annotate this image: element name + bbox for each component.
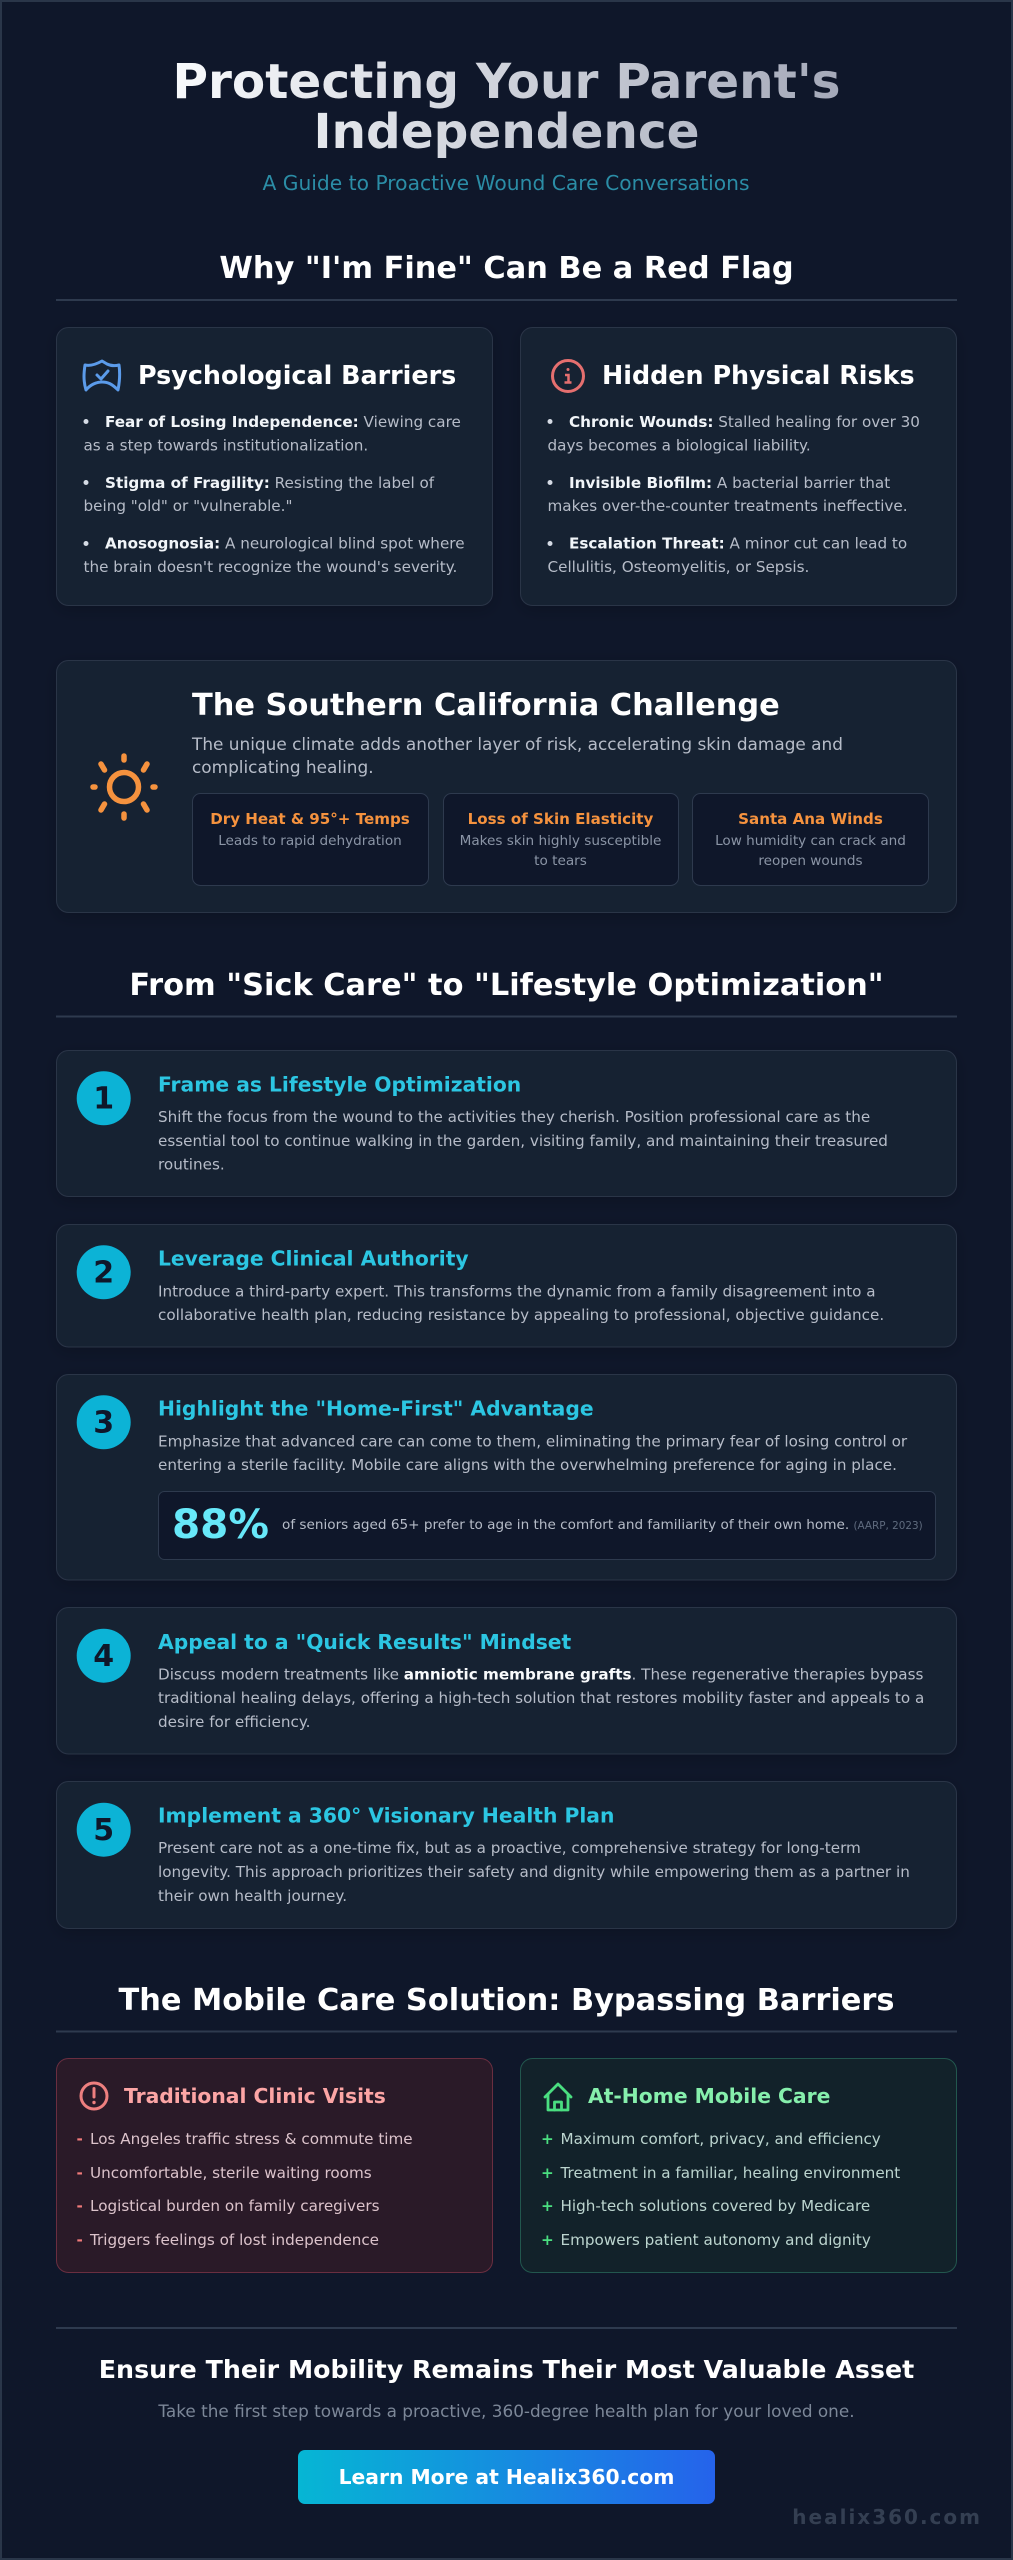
section heading: red flag: Why "I'm Fine" Can Be a Red Flag	[219, 251, 794, 286]
step 4	[56, 1608, 956, 1754]
watermark: healix360.com	[792, 2505, 982, 2529]
step 5: longevity. This approach prioritizes their safety and dignity while empowering them as a partner in	[158, 1863, 910, 1881]
panel: traditional clinic visits	[56, 2058, 492, 2272]
panel: southern california challenge	[56, 660, 956, 912]
call to action button	[298, 2450, 715, 2504]
list	[76, 2130, 413, 2249]
list: days becomes a biological liability.	[548, 436, 811, 454]
step 2	[56, 1224, 956, 1347]
footer rule	[56, 2327, 957, 2329]
section heading: lifestyle optimization: From "Sick Care" to "Lifestyle Optimization"	[129, 968, 884, 1003]
step 3	[56, 1374, 956, 1580]
list	[548, 413, 920, 576]
step 2: collaborative health plan, reducing resistance by appealing to professional, objective guidance.	[158, 1306, 884, 1324]
panel: at-home mobile care	[520, 2058, 956, 2272]
footer subtext: Take the first step towards a proactive, 360-degree health plan for your loved one.	[157, 2401, 855, 2421]
step 4: Appeal to a "Quick Results" Mindset	[158, 1630, 572, 1654]
icon: home	[545, 2084, 571, 2110]
step 1: Shift the focus from the wound to the activities they cherish. Position professional care as the	[158, 1108, 870, 1126]
card: dry heat: Leads to rapid dehydration	[218, 833, 402, 849]
list: Cellulitis, Osteomyelitis, or Sepsis.	[548, 558, 809, 576]
step 3: entering a sterile facility. Mobile care aligns with the overwhelming preference for aging in place.	[158, 1456, 897, 1474]
heading: At-Home Mobile Care	[588, 2084, 830, 2108]
list: Los Angeles traffic stress & commute time	[90, 2130, 413, 2148]
step 1: 1	[93, 1082, 114, 1116]
card: santa ana winds	[692, 794, 928, 886]
list: Treatment in a familiar, healing environment	[560, 2164, 900, 2182]
list	[541, 2130, 900, 2249]
icon: shield check	[84, 361, 120, 390]
callout: 88 percent stat: 88%	[172, 1500, 269, 1548]
list: Chronic Wounds: Stalled healing for over 30	[569, 413, 920, 431]
step 5: their own health journey.	[158, 1887, 347, 1905]
list: Fear of Losing Independence: Viewing care	[105, 413, 461, 431]
list	[84, 413, 465, 576]
callout: 88 percent stat	[158, 1492, 936, 1560]
step 2: 2	[93, 1256, 114, 1290]
list: Anosognosia: A neurological blind spot where	[105, 534, 465, 552]
icon: alert circle	[81, 2083, 107, 2109]
description: complicating healing.	[192, 757, 374, 777]
card: dry heat: Dry Heat & 95°+ Temps	[210, 810, 410, 828]
step 5: Implement a 360° Visionary Health Plan	[158, 1804, 614, 1828]
card: dry heat	[192, 794, 428, 886]
list: the brain doesn't recognize the wound's severity.	[84, 558, 457, 576]
list: being "old" or "vulnerable."	[84, 497, 292, 515]
step 4: Discuss modern treatments like amniotic membrane grafts. These regenerative therapies bypass	[158, 1666, 924, 1684]
section heading: mobile care solution: The Mobile Care Solution: Bypassing Barriers	[118, 1983, 895, 2018]
list: -	[76, 2231, 83, 2249]
subtitle: A Guide to Proactive Wound Care Conversations	[262, 171, 750, 195]
step 3: Emphasize that advanced care can come to them, eliminating the primary fear of losing control or	[158, 1432, 908, 1450]
list: -	[76, 2164, 83, 2182]
step 2: Introduce a third-party expert. This transforms the dynamic from a family disagreement into a	[158, 1282, 876, 1300]
list: +	[541, 2197, 554, 2215]
title: Independence	[313, 104, 700, 160]
list: Triggers feelings of lost independence	[89, 2231, 379, 2249]
list: as a step towards institutionalization.	[84, 436, 368, 454]
list: Uncomfortable, sterile waiting rooms	[90, 2164, 372, 2182]
heading: Psychological Barriers	[138, 360, 456, 390]
list: Maximum comfort, privacy, and efficiency	[560, 2130, 881, 2148]
card: santa ana winds: reopen wounds	[758, 853, 863, 869]
list: Logistical burden on family caregivers	[90, 2197, 380, 2215]
card: skin elasticity: Makes skin highly susceptible	[460, 833, 661, 849]
step 4: 4	[93, 1639, 114, 1674]
list: Stigma of Fragility: Resisting the label of	[105, 474, 435, 492]
icon: sun	[93, 756, 155, 818]
list: +	[541, 2164, 554, 2182]
callout: 88 percent stat: of seniors aged 65+ prefer to age in the comfort and familiarity of their own home. (AARP, 2023)	[282, 1517, 923, 1533]
step 1: Frame as Lifestyle Optimization	[158, 1073, 521, 1097]
card: skin elasticity	[444, 794, 678, 886]
list: -	[76, 2197, 83, 2215]
list: Escalation Threat: A minor cut can lead to	[569, 534, 907, 552]
list: +	[541, 2130, 554, 2148]
step 3: Highlight the "Home-First" Advantage	[158, 1397, 594, 1421]
title	[172, 54, 841, 160]
step 1: routines.	[158, 1156, 225, 1174]
list: Empowers patient autonomy and dignity	[560, 2231, 871, 2249]
title: Protecting Your Parent's	[172, 54, 841, 110]
heading: The Southern California Challenge	[192, 688, 780, 723]
footer heading: Ensure Their Mobility Remains Their Most Valuable Asset	[99, 2355, 914, 2384]
step 5: Present care not as a one-time fix, but as a proactive, comprehensive strategy for long-term	[158, 1839, 861, 1857]
heading: Hidden Physical Risks	[602, 360, 915, 390]
card: skin elasticity: Loss of Skin Elasticity	[468, 810, 654, 828]
list: makes over-the-counter treatments ineffective.	[548, 497, 908, 515]
step 1: essential tool to continue walking in the garden, visiting family, and maintaining their treasured	[158, 1132, 888, 1150]
list: +	[541, 2231, 554, 2249]
heading: Traditional Clinic Visits	[124, 2084, 386, 2108]
step 5: 5	[93, 1813, 114, 1848]
panel: psychological barriers	[56, 328, 492, 606]
step 1	[56, 1050, 956, 1196]
step 3: 3	[93, 1406, 114, 1440]
icon: info circle	[552, 360, 584, 392]
step 4: traditional healing delays, offering a high-tech solution that restores mobility faster and appeals to a	[158, 1689, 924, 1707]
step 2: Leverage Clinical Authority	[158, 1247, 469, 1271]
step 5	[56, 1782, 956, 1928]
card: santa ana winds: Low humidity can crack and	[715, 833, 906, 849]
card: santa ana winds: Santa Ana Winds	[738, 810, 883, 828]
list: -	[76, 2130, 83, 2148]
list: High-tech solutions covered by Medicare	[560, 2197, 870, 2215]
description	[191, 734, 843, 777]
call to action button: Learn More at Healix360.com	[339, 2465, 674, 2489]
description: The unique climate adds another layer of risk, accelerating skin damage and	[191, 734, 843, 754]
step 4: desire for efficiency.	[158, 1713, 310, 1731]
list: Invisible Biofilm: A bacterial barrier that	[569, 474, 890, 492]
card: skin elasticity: to tears	[534, 853, 587, 869]
panel: hidden physical risks	[520, 328, 956, 606]
